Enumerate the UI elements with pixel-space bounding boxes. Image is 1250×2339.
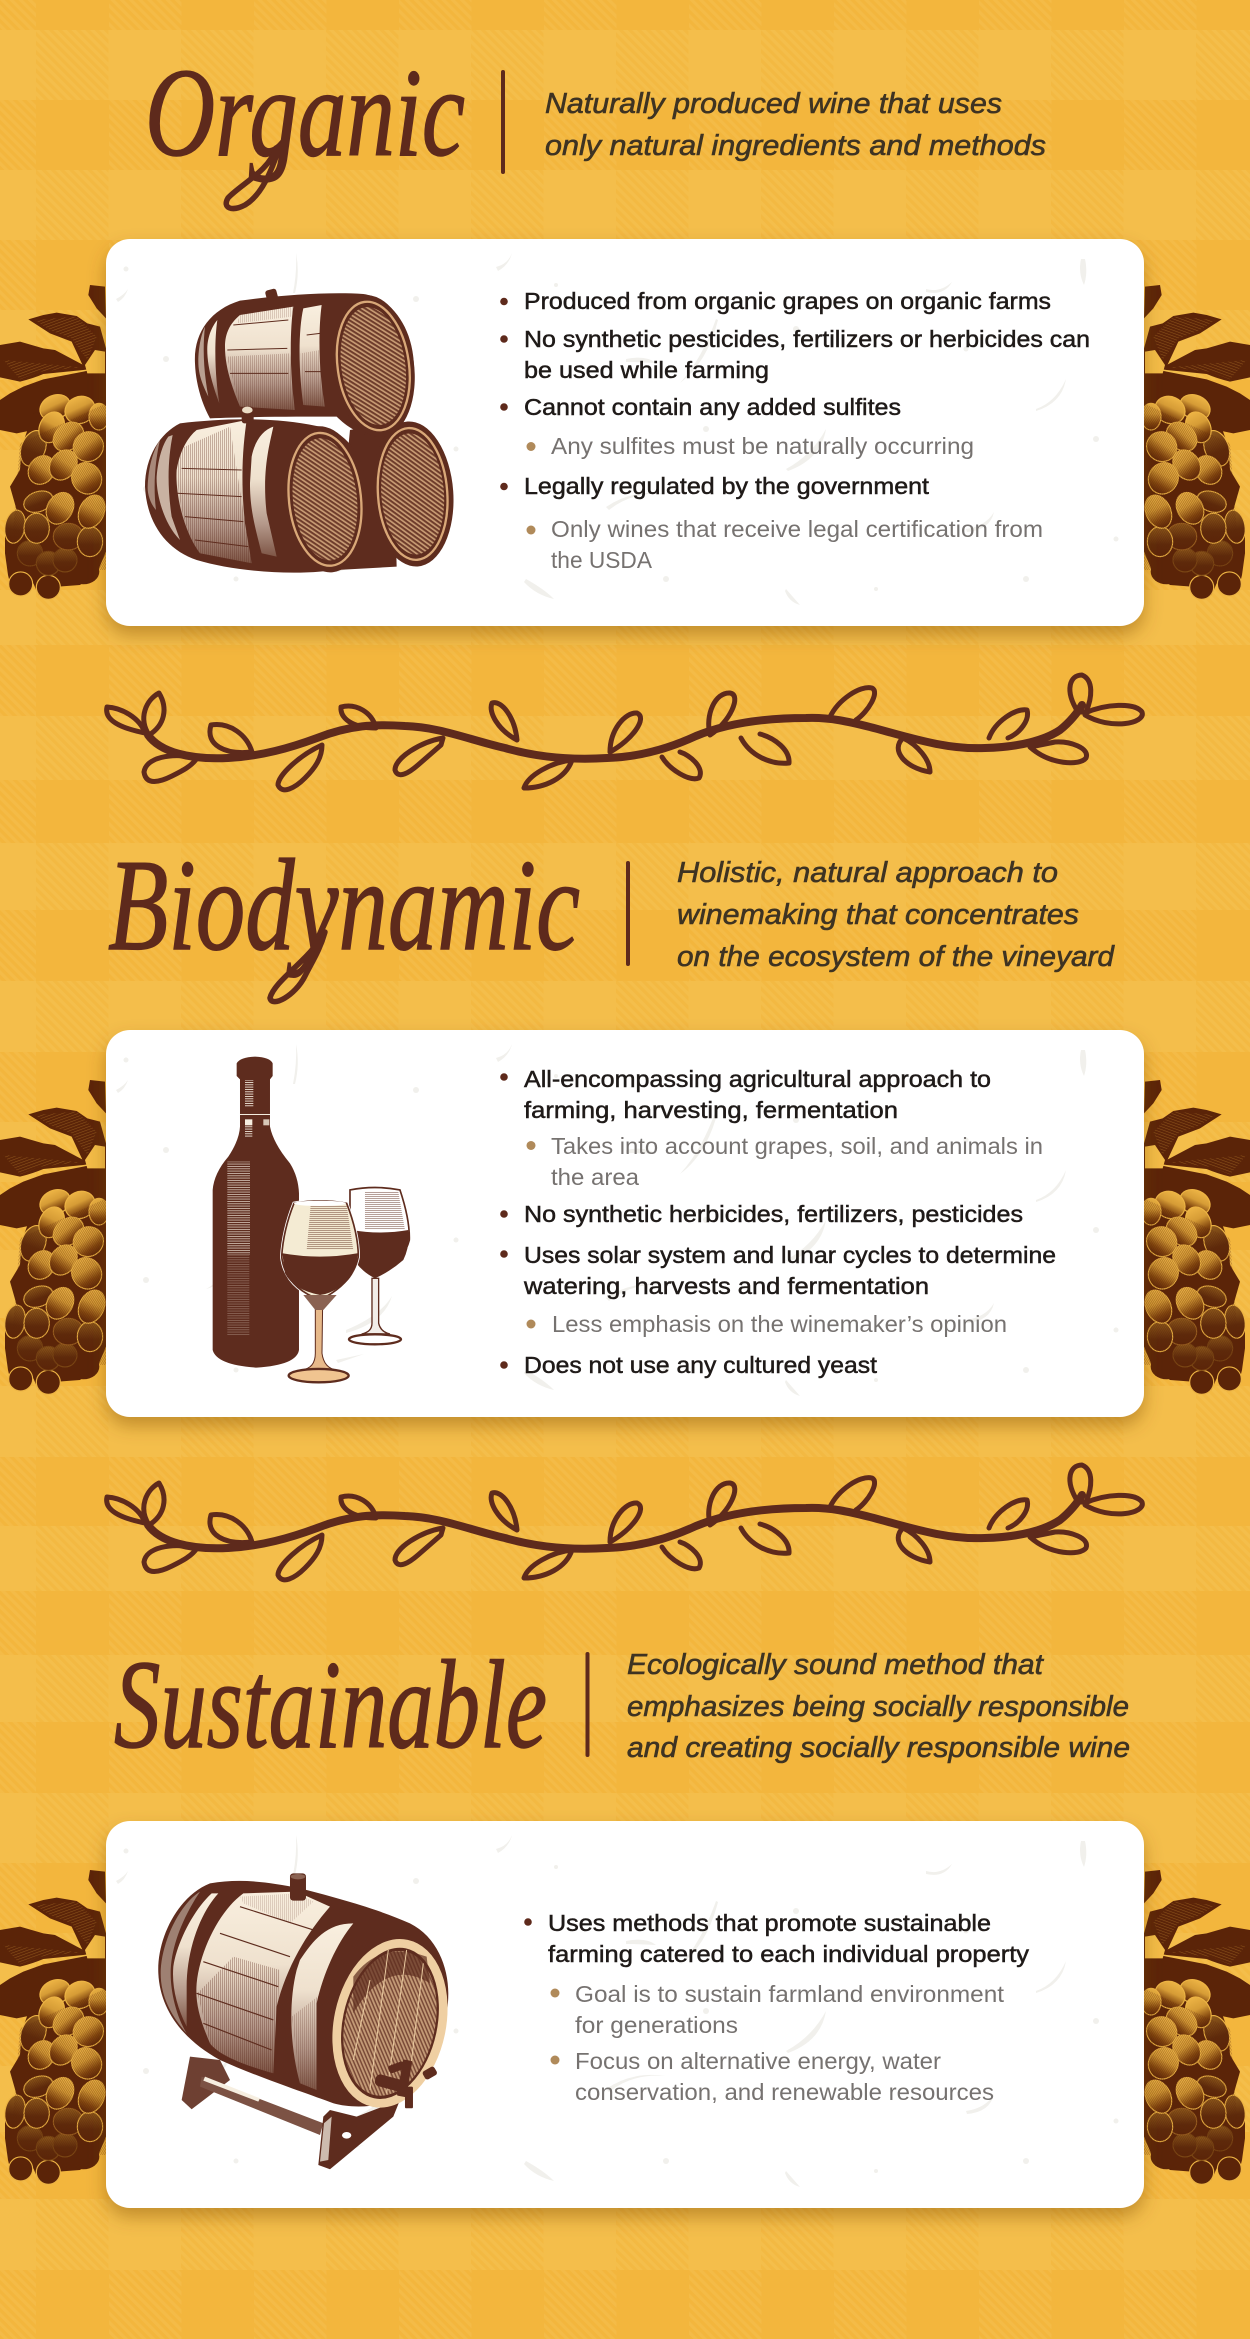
bullet list: Sustainable: for generations: [575, 2012, 738, 2038]
description: Biodynamic: Holistic, natural approach to: [677, 857, 1058, 889]
bullet list: Biodynamic: [500, 1066, 1056, 1378]
bullet list: Sustainable: conservation, and renewable resources: [575, 2079, 994, 2105]
title: Biodynamic: [108, 833, 580, 1002]
divider: [626, 861, 630, 966]
bullet list: Organic: Any sulfites must be naturally occurring: [551, 433, 974, 459]
bullet list: Biodynamic: Does not use any cultured yeast: [524, 1352, 877, 1378]
bullet list: Sustainable: Goal is to sustain farmland environment: [575, 1981, 1004, 2007]
grape cluster right: Biodynamic: [1140, 1080, 1250, 1394]
title: Organic: [145, 44, 465, 209]
description: Organic: only natural ingredients and methods: [545, 130, 1046, 162]
bullet list: Organic: No synthetic pesticides, fertilizers or herbicides can: [524, 326, 1090, 352]
bullet list: Organic: the USDA: [551, 547, 652, 573]
illustration: stacked barrels: [145, 288, 458, 577]
bullet list: Sustainable: farming catered to each individual property: [548, 1941, 1029, 1967]
bullet list: Sustainable: [524, 1910, 1029, 2105]
description: Biodynamic: on the ecosystem of the vineyard: [677, 941, 1115, 973]
description: Sustainable: [627, 1649, 1130, 1764]
vine divider 2: [107, 1465, 1142, 1580]
title: Sustainable: Sustainable: [114, 1636, 547, 1775]
panel: Biodynamic: [106, 1030, 1144, 1417]
bullet list: Organic: [500, 288, 1090, 573]
grape cluster right: Sustainable: [1140, 1870, 1250, 2184]
illustration: bottle and glasses: [213, 1057, 409, 1382]
grape cluster left: Organic: [0, 285, 110, 599]
title: Organic: Organic: [145, 44, 465, 183]
front glass: [282, 1201, 358, 1300]
bullet list: Sustainable: Focus on alternative energy, water: [575, 2048, 941, 2074]
bullet list: Sustainable: Uses methods that promote sustainable: [548, 1910, 991, 1936]
description: Organic: [545, 88, 1046, 162]
bullet list: Biodynamic: farming, harvesting, fermentation: [524, 1097, 898, 1123]
back glass: [350, 1187, 409, 1273]
vine divider 1: [107, 675, 1142, 790]
heading: Sustainable: [114, 1636, 1130, 1775]
heading: Biodynamic: [108, 833, 1115, 1002]
bullet list: Biodynamic: Takes into account grapes, soil, and animals in: [551, 1133, 1043, 1159]
title: Biodynamic: Biodynamic: [108, 833, 580, 978]
description: Organic: Naturally produced wine that uses: [545, 88, 1002, 120]
bullet list: Organic: Only wines that receive legal certification from: [551, 516, 1043, 542]
grape cluster left: Biodynamic: [0, 1080, 110, 1394]
description: Sustainable: Ecologically sound method that: [627, 1649, 1045, 1681]
bullet list: Biodynamic: Less emphasis on the winemaker’s opinion: [552, 1311, 1007, 1337]
bullet list: Biodynamic: All-encompassing agricultural approach to: [524, 1066, 991, 1092]
description: Biodynamic: [677, 857, 1115, 973]
bullet list: Organic: be used while farming: [524, 357, 769, 383]
description: Sustainable: and creating socially responsible wine: [627, 1732, 1130, 1764]
description: Sustainable: emphasizes being socially responsible: [627, 1691, 1129, 1723]
panel: Sustainable: [106, 1821, 1144, 2208]
grape cluster right: Organic: [1140, 285, 1250, 599]
grape cluster left: Sustainable: [0, 1870, 110, 2184]
bullet list: Biodynamic: No synthetic herbicides, fertilizers, pesticides: [524, 1201, 1023, 1227]
bullet list: Biodynamic: Uses solar system and lunar cycles to determine: [524, 1242, 1056, 1268]
bullet list: Biodynamic: the area: [551, 1164, 640, 1190]
bullet list: Organic: Legally regulated by the government: [524, 473, 929, 499]
divider: [586, 1652, 590, 1757]
bullet list: Biodynamic: watering, harvests and fermentation: [523, 1273, 929, 1299]
bullet list: Organic: Cannot contain any added sulfites: [524, 394, 901, 420]
description: Biodynamic: winemaking that concentrates: [677, 899, 1079, 931]
bullet list: Organic: Produced from organic grapes on organic farms: [524, 288, 1051, 314]
panel: Organic: [106, 239, 1144, 626]
divider: [501, 70, 505, 174]
heading: Organic: [145, 44, 1046, 209]
illustration: barrel on stand: [158, 1873, 461, 2169]
